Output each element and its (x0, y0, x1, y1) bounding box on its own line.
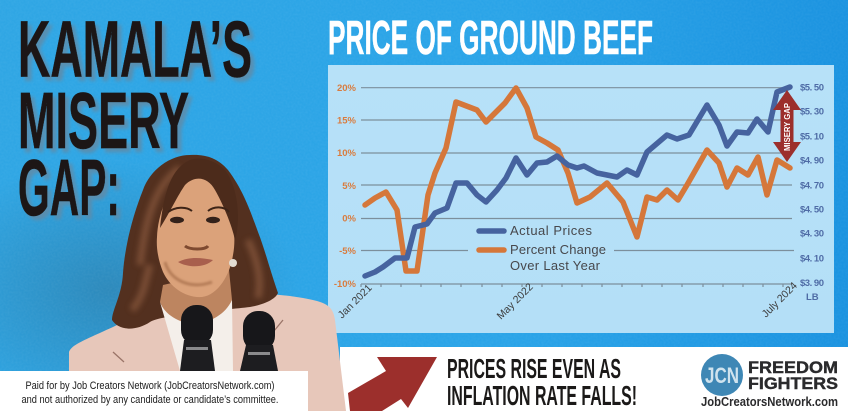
bottom message: PRICES RISE EVEN AS (447, 353, 621, 384)
jacket lapels (113, 320, 283, 362)
legend: Percent Change (510, 242, 606, 257)
legend: Over Last Year (510, 258, 601, 273)
right axis labels: $5. 10 (800, 132, 824, 142)
left axis labels: -10% (334, 279, 357, 290)
right axis labels: $4. 50 (800, 204, 824, 216)
right axis labels: $4. 90 (800, 156, 824, 166)
left axis labels: 10% (337, 148, 357, 159)
logo: Freedom Fighters: JCN (705, 363, 739, 388)
right axis labels: $3. 90 (800, 278, 824, 289)
disclaimer (0, 371, 308, 411)
right axis labels (800, 82, 824, 303)
hair highlights (132, 168, 260, 310)
title (18, 4, 252, 232)
logo: Freedom Fighters: FREEDOM (748, 359, 838, 377)
right axis labels: $5. 30 (800, 106, 824, 118)
orange line: percent change over last year (365, 88, 790, 271)
blue line: actual prices (365, 87, 790, 276)
blouse (160, 300, 233, 371)
left axis labels: 15% (337, 116, 357, 126)
right axis labels: $4. 30 (800, 228, 824, 240)
right axis labels: $4. 70 (800, 180, 824, 192)
x axis labels (336, 280, 800, 322)
bottom message: INFLATION RATE FALLS! (447, 380, 637, 411)
x axis labels: Jan 2021 (336, 282, 375, 321)
grid lines (361, 88, 794, 287)
arrow: misery gap (773, 90, 801, 162)
jacket (69, 293, 346, 411)
fringe hair (160, 158, 238, 240)
x axis labels: May 2022 (495, 281, 536, 322)
right axis labels: LB (806, 292, 819, 303)
legend (479, 223, 606, 273)
bottom white bar (340, 347, 848, 411)
microphone left (180, 305, 215, 371)
legend: Actual Prices (510, 223, 592, 238)
photo: candidate at microphones (69, 155, 346, 411)
title: MISERY (18, 76, 189, 165)
logo: Freedom Fighters: FIGHTERS (748, 375, 838, 393)
disclaimer: and not authorized by any candidate or candidate’s committee. (22, 394, 278, 406)
panel: chart (328, 65, 834, 333)
neck and chest (160, 270, 232, 335)
microphone right (240, 311, 278, 371)
right axis labels: $4. 10 (800, 254, 824, 264)
arrow: prices rising (348, 357, 437, 411)
title: GAP: (18, 143, 120, 232)
face (157, 177, 234, 297)
logo: Freedom Fighters (701, 354, 838, 409)
hair back (112, 155, 278, 329)
disclaimer: Paid for by Job Creators Network (JobCreatorsNetwork.com) (26, 380, 274, 392)
x axis labels: July 2024 (760, 280, 800, 320)
arrow: misery gap: MISERY GAP (782, 103, 792, 151)
title: KAMALA’S (18, 4, 252, 94)
right axis labels: $5. 50 (800, 82, 824, 94)
left axis labels: 20% (337, 83, 357, 94)
bottom message (447, 353, 637, 411)
left axis labels (334, 83, 357, 290)
left axis labels: 5% (342, 181, 357, 192)
face features (165, 207, 237, 285)
left axis labels: 0% (342, 214, 357, 224)
left axis labels: -5% (339, 246, 357, 257)
